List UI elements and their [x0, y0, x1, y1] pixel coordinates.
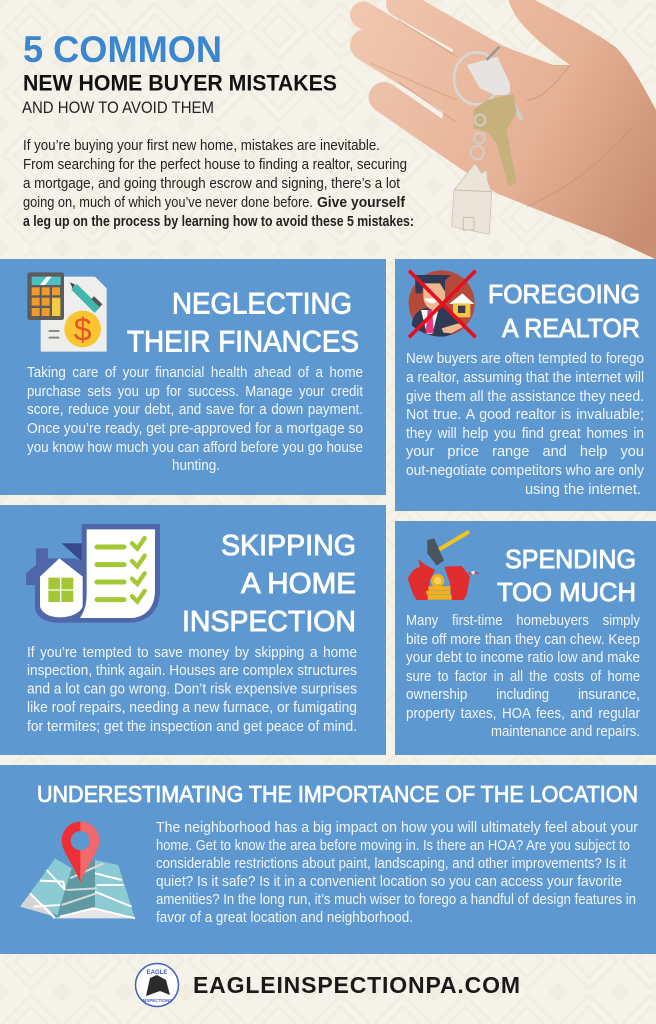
heading: spending too much: SPENDING	[505, 544, 636, 574]
heading: spending too much: TOO MUCH	[497, 577, 636, 607]
text: spending body: your debt to income ratio low and make	[406, 650, 640, 666]
text: location body: The neighborhood has a big impact on how you will ultimately feel about your	[156, 820, 638, 836]
title: NEW HOME BUYER MISTAKES	[23, 70, 337, 96]
intro paragraph	[23, 138, 414, 230]
text: realtor body: give them all the assistance they need.	[406, 389, 644, 405]
text: realtor body: your price range and help you	[406, 444, 644, 460]
panel: underestimating the location	[0, 765, 656, 954]
text: realtor body: Not true. A good realtor is invaluable;	[406, 407, 644, 423]
photo: hand holding house keys	[363, 0, 656, 259]
heading: skipping a home inspection: A HOME	[241, 568, 356, 600]
icon: map with location pin	[20, 822, 135, 918]
icon: key ring	[454, 47, 522, 186]
text: finances body: purchase sets you up for success. Manage your credit	[27, 384, 363, 400]
text: realtor body: they will help you find great homes in	[406, 426, 644, 442]
heading: spending too much	[497, 544, 636, 607]
heading: foregoing a realtor: A REALTOR	[502, 313, 640, 343]
panel: skipping a home inspection	[0, 505, 386, 755]
title: 5 COMMON	[23, 29, 222, 70]
text: location body: favor of a great location and neighborhood.	[156, 910, 413, 926]
heading: foregoing a realtor: FOREGOING	[488, 279, 640, 309]
title	[22, 29, 337, 117]
text: finances body: score, reduce your debt, and save for a down payment.	[27, 402, 363, 418]
icon: crossed-out realtor	[409, 270, 476, 337]
intro paragraph: From searching for the perfect house to finding a realtor, securing	[23, 157, 407, 173]
footer logo: eagle inspections: INSPECTIONS	[142, 998, 172, 1003]
heading: neglecting their finances: NEGLECTING	[172, 288, 352, 320]
heading: skipping a home inspection: SKIPPING	[221, 530, 356, 562]
footer logo: eagle inspections: EAGLE	[147, 970, 167, 976]
icon: calculator, document and coin: $	[74, 312, 92, 348]
title: AND HOW TO AVOID THEM	[22, 99, 214, 117]
text: finances body: hunting.	[172, 458, 220, 474]
text: location body: quiet? Is it safe? Is it in a convenient location so you can access your favorite	[156, 874, 622, 890]
icon: house key fob	[452, 163, 492, 234]
text: realtor body: using the internet.	[525, 482, 641, 498]
intro paragraph: If you’re buying your first new home, mistakes are inevitable.	[23, 138, 380, 154]
panel: neglecting their finances	[0, 259, 386, 495]
text: spending body	[406, 613, 641, 740]
text: spending body: ownership including insurance,	[406, 687, 640, 703]
text: spending body: property taxes, HOA fees, and regular	[406, 706, 640, 722]
icon: hammer and broken piggy bank	[408, 532, 478, 600]
text: inspection body	[27, 645, 357, 735]
intro paragraph: Give yourself	[317, 195, 405, 211]
text: spending body: bite off more than they can chew. Keep	[406, 632, 640, 648]
heading: skipping a home inspection: INSPECTION	[182, 606, 356, 638]
intro paragraph: a mortgage, and going through escrow and signing, there’s a lot	[23, 176, 400, 192]
icon: calculator, document and coin	[27, 272, 107, 352]
text: location body	[156, 820, 638, 926]
text: spending body: maintenance and repairs.	[491, 724, 640, 740]
heading: neglecting their finances: THEIR FINANCES	[127, 326, 359, 358]
intro paragraph: a leg up on the process by learning how to avoid these 5 mistakes:	[23, 214, 414, 230]
heading: neglecting their finances	[127, 288, 359, 358]
panel: spending too much	[395, 521, 656, 755]
icon: house and checklist	[26, 524, 160, 623]
text: finances body: Once you’re ready, get pre-approved for a mortgage so	[27, 421, 363, 437]
text: realtor body: New buyers are often tempted to forego	[406, 351, 644, 367]
text: inspection body: and a lot can go wrong. Don’t risk expensive surprises	[27, 682, 357, 698]
text: finances body	[27, 365, 363, 474]
text: inspection body: inspection, think again. Houses are complex structures	[27, 663, 357, 679]
text: finances body: you know how much you can afford before you go house	[27, 440, 363, 456]
text: inspection body: for termites; get the inspection and get peace of mind.	[27, 719, 357, 735]
text: inspection body: If you’re tempted to save money by skipping a home	[27, 645, 357, 661]
text: realtor body	[406, 351, 645, 498]
footer website: EAGLEINSPECTIONPA.COM	[193, 972, 520, 998]
text: realtor body: a realtor, assuming that the internet will	[406, 370, 644, 386]
text: finances body: Taking care of your financial health ahead of a home	[27, 365, 363, 381]
text: realtor body: out-negotiate competitors who are only	[406, 463, 645, 479]
text: inspection body: like roof repairs, needing a new furnace, or fumigating	[27, 700, 357, 716]
intro paragraph: going on, much of which you’ve never done before.	[23, 195, 313, 211]
heading: foregoing a realtor	[488, 279, 640, 343]
footer logo: eagle inspections	[136, 964, 178, 1006]
heading: skipping a home inspection	[182, 530, 356, 638]
text: spending body: Many first-time homebuyers simply	[406, 613, 641, 629]
panel: foregoing a realtor	[395, 259, 656, 511]
